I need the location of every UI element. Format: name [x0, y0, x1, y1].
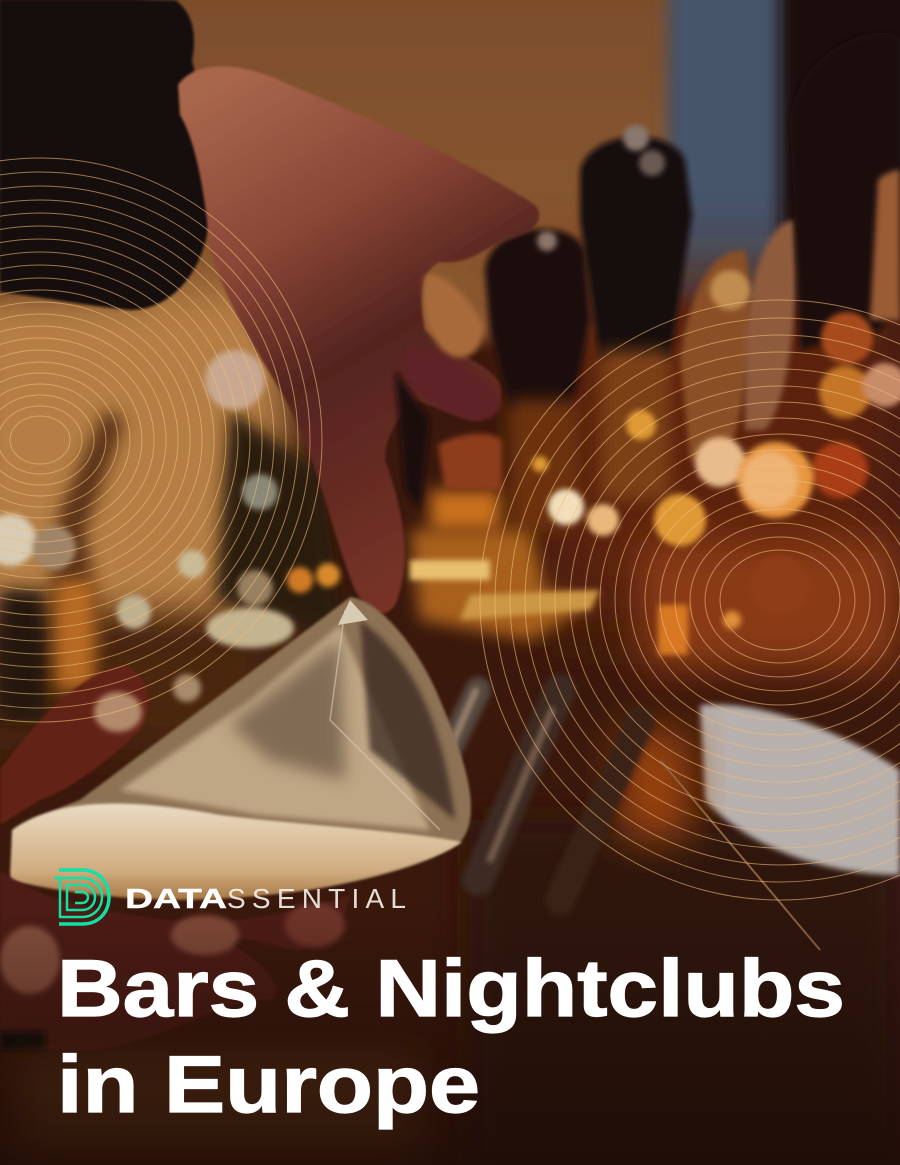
pouring hand	[178, 66, 539, 613]
lower hand holding glass	[0, 665, 420, 1165]
beer glass	[10, 597, 471, 900]
title line 2: in Europe	[57, 1040, 480, 1130]
logo wordmark: DATA	[125, 883, 227, 914]
logo mark	[54, 870, 109, 924]
bokeh lights	[0, 270, 900, 702]
logo	[54, 870, 406, 924]
logo wordmark	[125, 883, 406, 914]
beer tap spouts	[432, 690, 640, 900]
contour line overlay	[0, 158, 900, 900]
tap handles	[485, 33, 900, 530]
bottom darkening	[0, 900, 900, 1165]
title line 1: Bars & Nightclubs	[57, 944, 845, 1034]
black sleeve	[0, 0, 210, 310]
logo wordmark: SSENTIAL	[227, 883, 406, 914]
